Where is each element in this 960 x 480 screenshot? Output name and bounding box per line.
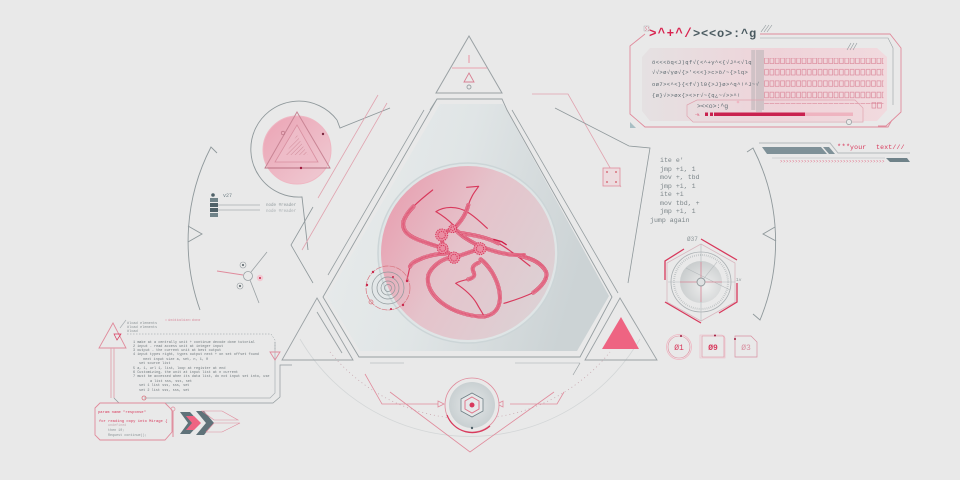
code panel labels: #load xyxy=(127,329,138,334)
top left target circle xyxy=(251,101,390,250)
code panel labels: #load elements xyxy=(127,321,157,326)
bottom left code panel xyxy=(99,318,292,403)
code panel text: set 1 list sss, sss, set xyxy=(139,383,189,388)
glyph data rows: √√>ø√γø√{>'<<<}>c>ö/~{>lq> xyxy=(652,69,748,76)
right triangle with solid red triangle xyxy=(585,298,657,360)
bottom dotted arc xyxy=(300,339,640,436)
glyph data rows: ö<<<öq<J)qf√(<^+γ^<{√J^<√lq xyxy=(652,59,752,66)
dice icon xyxy=(603,168,620,186)
hexagon dial: 1v xyxy=(736,277,742,283)
legend bars: node #reader xyxy=(266,203,297,208)
progress sub panel: ><<o>:^g xyxy=(697,102,728,110)
right bracket arc xyxy=(747,148,776,320)
hexagon dial: Ø37 xyxy=(687,236,698,243)
diagonal lines near target xyxy=(291,95,387,283)
assembly text block: ite +i xyxy=(660,191,684,198)
code panel text: 3 output - the current unit at best output xyxy=(133,348,221,353)
assembly text block: mov +, tbd xyxy=(660,174,700,181)
assembly text block: mov tbd, + xyxy=(660,200,700,207)
bottom left response box: for reading copy into Mirage { xyxy=(99,419,167,424)
legend bars: v27 xyxy=(223,193,232,199)
code panel text: 2 input - read access unit at integer input xyxy=(133,344,223,349)
chevron icon xyxy=(180,411,240,435)
right header bars xyxy=(759,143,910,162)
lower frame strokes xyxy=(370,363,580,375)
node diagram xyxy=(217,252,267,303)
legend bars xyxy=(210,193,297,217)
progress sub panel xyxy=(687,100,863,125)
legend bars: node #reader xyxy=(266,209,297,214)
code panel labels xyxy=(127,318,200,334)
code panel text: 7 must be accessed when its data list, do not input set into, use xyxy=(133,374,270,379)
bottom left response box: Request continue(); xyxy=(108,433,147,438)
tofu box rows xyxy=(764,58,884,108)
microscope disc with pathogen strands xyxy=(378,163,558,343)
bottom left response box xyxy=(95,403,175,440)
code panel text: set 2 list sss, sss, set xyxy=(139,388,189,393)
upper right angled lines xyxy=(532,94,650,283)
central hexagonal panel xyxy=(323,99,618,357)
bottom left response box: param name "response" xyxy=(98,410,146,415)
progress sub panel: ~% xyxy=(695,114,700,118)
code panel text: 1 make at a centrally unit + continue decode done tutorial xyxy=(133,340,255,345)
code panel text: a list sss, sss, set xyxy=(150,379,192,384)
code panel labels: #load elements xyxy=(127,325,157,330)
assembly text block: jump again xyxy=(650,217,690,224)
hexagon dial xyxy=(665,236,742,323)
glyph data rows: oø7><^<}{<f√)l0{>J}ø>^q^!^J~√ xyxy=(652,81,760,88)
top right data panel xyxy=(630,34,901,128)
right header bars: text/// xyxy=(876,144,905,151)
vertical scan lines xyxy=(752,50,764,112)
glyph data rows xyxy=(652,59,760,99)
button 01: Ø1 xyxy=(674,344,684,353)
right header bars: your xyxy=(850,144,866,151)
code panel header triangle xyxy=(99,323,126,398)
right header bars: *** xyxy=(837,144,851,152)
tangled red strands xyxy=(403,186,546,317)
title text: >^+^/ xyxy=(649,27,693,41)
bottom left response box: undefined xyxy=(108,423,126,428)
code panel labels: initialize done xyxy=(168,318,200,323)
button 03: Ø3 xyxy=(741,344,751,353)
assembly text block xyxy=(650,157,700,224)
code panel text: set source list xyxy=(139,361,171,366)
code panel text xyxy=(133,340,270,393)
assembly text block: jmp +i, 1 xyxy=(660,208,696,215)
left triangle xyxy=(282,298,353,360)
bottom left response box: then 10; xyxy=(108,428,124,433)
code panel frame xyxy=(114,320,292,403)
assembly text block: ite e' xyxy=(660,157,684,164)
code panel text: 4 input types right, types output next + on set offset found xyxy=(133,352,259,357)
button 09: Ø9 xyxy=(708,344,718,353)
code panel text: next input size a, set, n, 1, 0 xyxy=(143,357,208,362)
title text: ><<o>:^g xyxy=(693,27,757,41)
code panel text: 6 Customizing, the unit at input list at n current xyxy=(133,370,238,375)
glyph data rows: {ø}√>>øx{><>r√~{q¿~√>>^! xyxy=(652,92,741,99)
assembly text block: jmp +i, 1 xyxy=(660,166,696,173)
bottom hub emblem xyxy=(365,374,564,452)
top triangle xyxy=(436,36,502,93)
numbered buttons xyxy=(666,334,757,360)
assembly text block: jmp +i, 1 xyxy=(660,183,696,190)
left bracket arc xyxy=(188,147,217,310)
code panel text: 5 a, 1, url 1, list, loop at register at end xyxy=(133,366,225,371)
small radar rings xyxy=(366,266,410,310)
title text xyxy=(644,25,772,41)
